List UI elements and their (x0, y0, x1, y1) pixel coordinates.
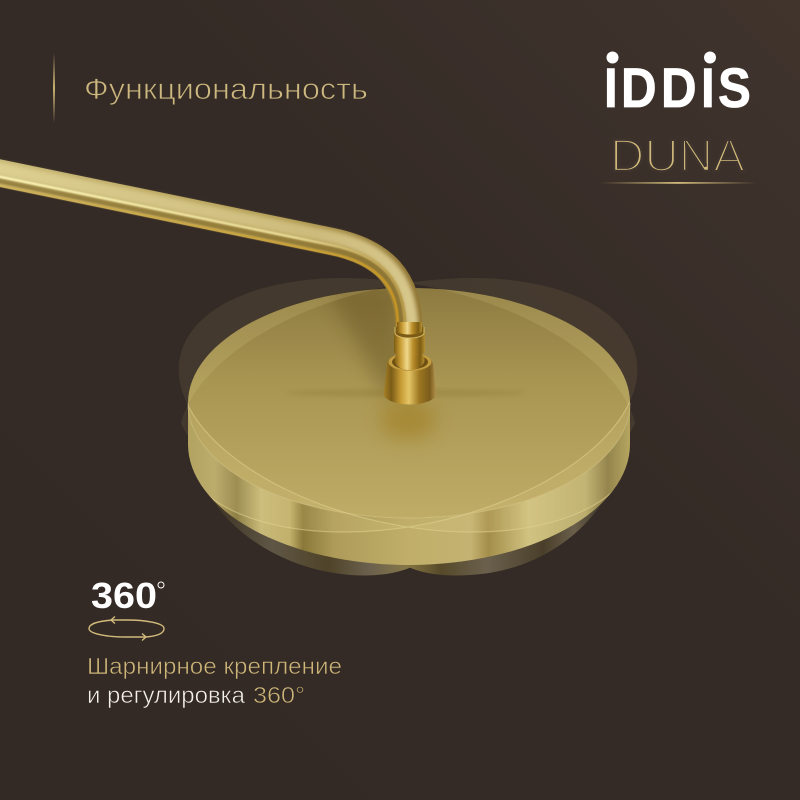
heading: Функциональность (84, 73, 368, 106)
brand logo: IDDIS: IDDIS (604, 57, 751, 120)
pipe upper pale band (0, 168, 412, 330)
ball neck (394, 350, 424, 370)
ghost overlays (178, 278, 638, 436)
feature description (87, 653, 342, 708)
ghost faint lobes (178, 278, 638, 436)
cone top rim (388, 353, 432, 371)
pipe bright line (0, 176, 405, 330)
series name: DUNA: DUNA (610, 130, 745, 181)
line 2 white: и регулировка (87, 682, 245, 708)
pipe lower bright edge (0, 184, 398, 330)
line 2 gold: 360° (253, 682, 305, 708)
lower ghost lobe right (395, 480, 604, 575)
shower arm pipe (0, 168, 412, 330)
header accent line (53, 53, 55, 123)
ghost light crescents (302, 290, 610, 529)
cone opening (392, 354, 428, 370)
360 number: 360 (91, 575, 157, 616)
rotation badge (89, 575, 164, 640)
ghost highlight inside disc (179, 278, 637, 532)
series underline (600, 182, 756, 184)
shower head with motion ghosts (179, 278, 637, 575)
collar ring (395, 327, 424, 338)
main disc top face (188, 288, 630, 518)
collar (394, 332, 425, 356)
line 1: Шарнирное крепление (87, 653, 342, 679)
arrowhead top (111, 616, 115, 624)
horizontal sheen (316, 391, 495, 395)
arrowhead bottom (142, 634, 146, 640)
ghost edge lines (188, 400, 630, 532)
degree mark (158, 582, 164, 588)
swivel joint (384, 322, 436, 405)
main disc side (188, 403, 630, 565)
main disc lower rim highlight (188, 403, 630, 518)
disc shading (316, 289, 495, 446)
pipe shade band (0, 180, 401, 330)
pipe shadow on disc (332, 289, 397, 392)
lower ghost lobe left (212, 480, 425, 575)
pipe body (0, 172, 409, 330)
cone base (384, 355, 436, 405)
pipe insert (397, 322, 422, 334)
rotation ellipse icon (89, 616, 164, 640)
base reflection (380, 400, 436, 440)
